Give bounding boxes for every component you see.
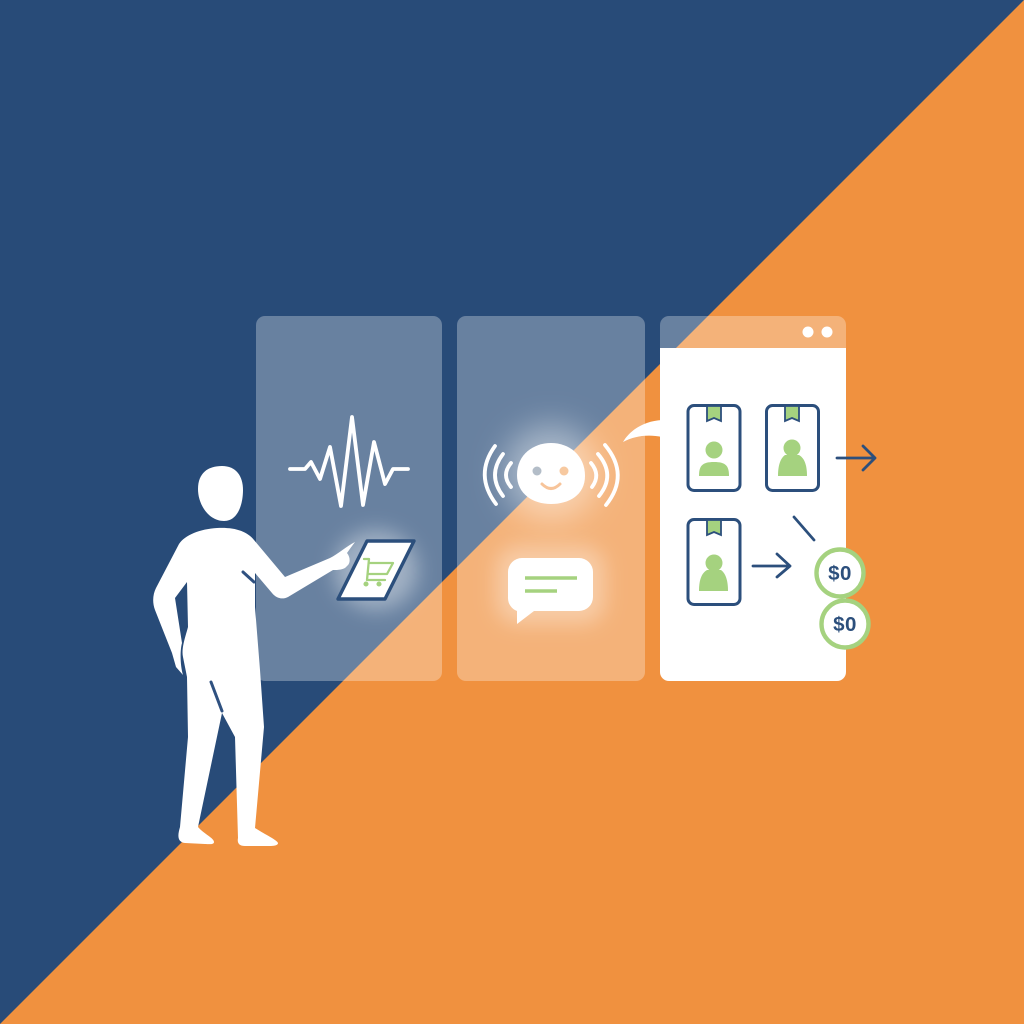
figure head xyxy=(198,466,243,521)
panel: signal xyxy=(256,316,442,681)
window control dots xyxy=(802,326,832,338)
icon: glowing tablet with cart xyxy=(334,530,418,610)
eyes xyxy=(532,466,542,476)
smile xyxy=(542,484,560,488)
diagonal connector line xyxy=(794,517,814,540)
coin: first price xyxy=(816,550,864,596)
icon: waveform xyxy=(290,417,408,506)
card: product one xyxy=(688,406,740,490)
coin: first price: $0 xyxy=(828,562,852,585)
figure: standing person xyxy=(153,466,355,846)
panel: assistant xyxy=(457,316,645,681)
arrow: right from top cards xyxy=(837,446,875,470)
figure: arm and leg crease lines xyxy=(211,572,254,711)
coin: second price xyxy=(822,600,868,648)
panel: product window xyxy=(660,316,846,681)
figure body xyxy=(153,528,355,846)
icon: shopping cart xyxy=(364,559,393,585)
icon: speech bubble xyxy=(496,546,605,624)
message lines xyxy=(525,578,577,591)
card: product two xyxy=(766,406,818,490)
sound waves xyxy=(485,445,618,505)
card: product three xyxy=(688,520,740,604)
connector swoosh xyxy=(623,420,662,442)
arrow: right from third card xyxy=(753,554,790,577)
face xyxy=(517,443,585,504)
coin: second price: $0 xyxy=(833,613,857,636)
icon: assistant face with sound waves xyxy=(485,425,618,521)
